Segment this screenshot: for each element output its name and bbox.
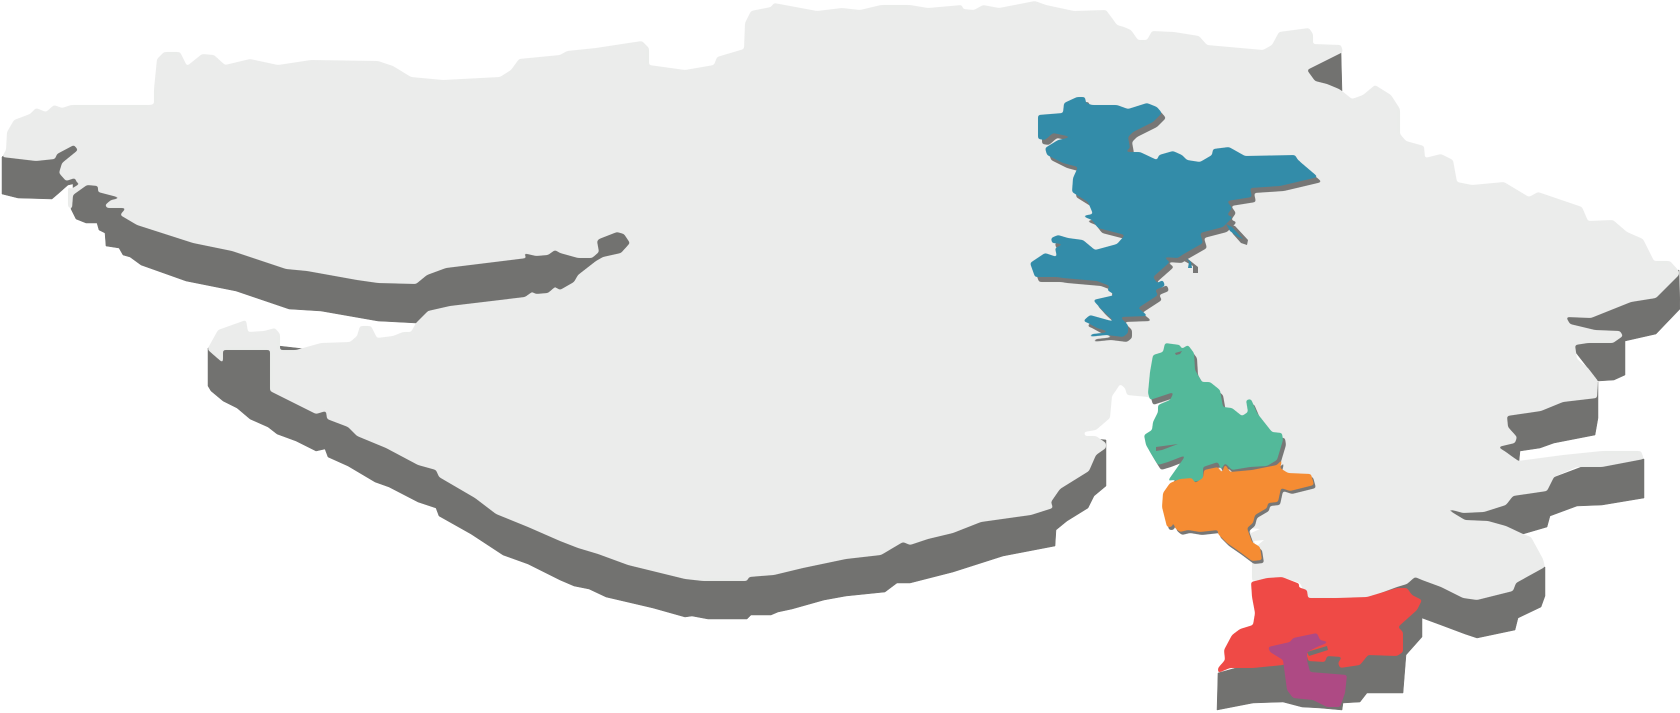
white gaps beside the orange region (1249, 528, 1264, 545)
region: orange (1162, 458, 1316, 564)
region: blue (1030, 97, 1322, 342)
region: teal (1144, 343, 1286, 487)
region: red (1218, 577, 1422, 673)
region: red inner shadow (1307, 646, 1328, 656)
region: purple (1268, 633, 1347, 707)
